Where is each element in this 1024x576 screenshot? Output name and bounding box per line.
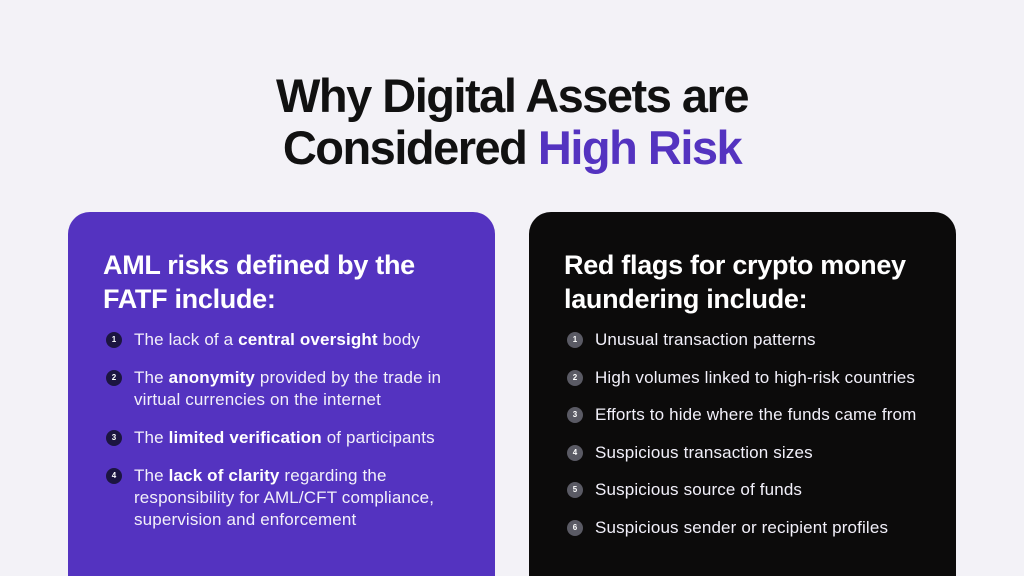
heading: red flags: Red flags for crypto money [564,250,906,280]
item 4 [106,466,434,529]
flag 4: 4 [573,448,577,457]
title: Considered High Risk [283,121,741,174]
flag 5: Suspicious source of funds [595,480,802,499]
flag 2: 2 [573,373,577,382]
panel: FATF AML risks [68,212,495,576]
item 1: 1 [112,335,116,344]
item 2: virtual currencies on the internet [134,390,381,409]
item 3: 3 [112,433,116,442]
heading: AML risks: FATF include: [103,284,276,314]
flag 1: 1 [573,335,577,344]
item 4: supervision and enforcement [134,510,356,529]
item 3: The limited verification of participants [134,428,435,447]
panel: red flags [529,212,956,576]
item 2: 2 [112,373,116,382]
item 1: The lack of a central oversight body [134,330,420,349]
flag 3: Efforts to hide where the funds came from [595,405,916,424]
title [276,69,748,174]
item 4: The lack of clarity regarding the [134,466,387,485]
item 4: responsibility for AML/CFT compliance, [134,488,434,507]
heading: red flags: laundering include: [564,284,807,314]
title: Why Digital Assets are [276,69,748,122]
flag 2: High volumes linked to high-risk countries [595,368,915,387]
heading: AML risks: AML risks defined by the [103,250,415,280]
flag 5: 5 [573,485,577,494]
flag 4: Suspicious transaction sizes [595,443,813,462]
heading: red flags [564,250,906,314]
item 2: The anonymity provided by the trade in [134,368,441,387]
flag 6: Suspicious sender or recipient profiles [595,518,888,537]
item 2 [106,368,441,409]
flag 1: Unusual transaction patterns [595,330,816,349]
item 4: 4 [112,471,116,480]
flag 3: 3 [573,410,577,419]
flag 6: 6 [573,523,577,532]
heading: AML risks [103,250,415,314]
